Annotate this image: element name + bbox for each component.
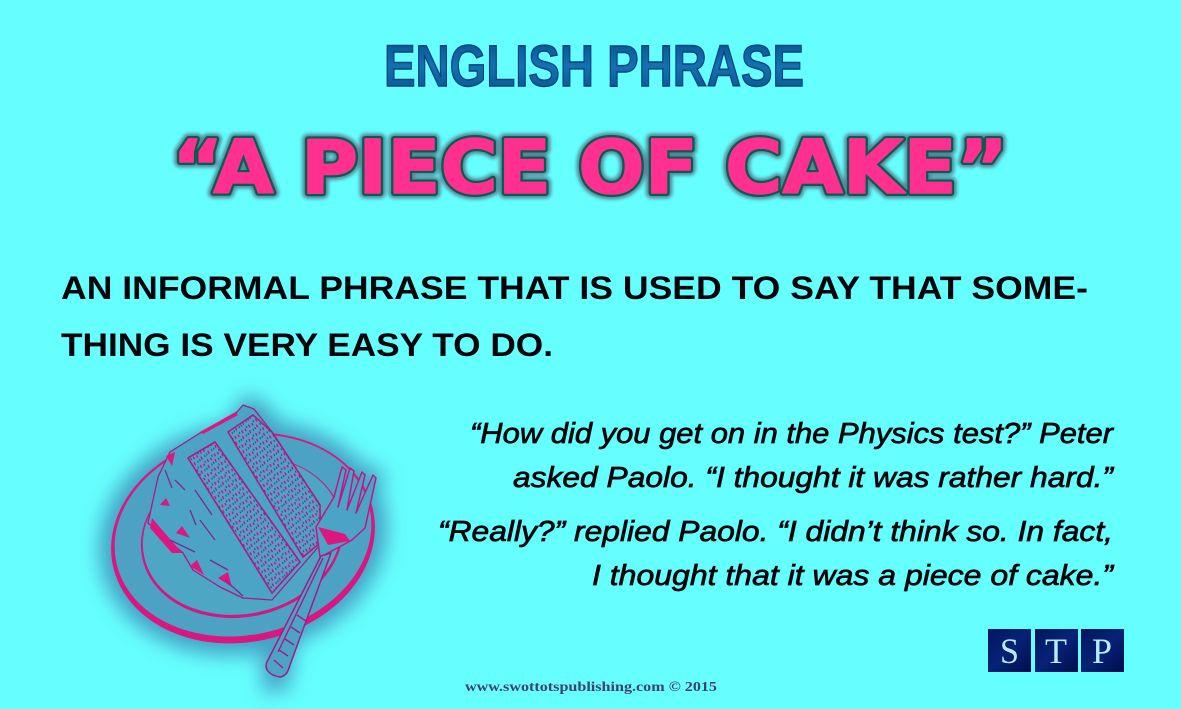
footer website credit: www.swottotspublishing.com © 2015 [465,679,717,694]
fork [266,467,376,677]
outer plate rim [91,409,395,667]
logo: STP: T [1045,631,1067,671]
example dialogue: asked Paolo. “I thought it was rather hard.” [513,462,1114,494]
sponge crumbs lower [188,442,300,593]
frosting highlights [150,412,238,587]
logo: STP: S [1000,631,1019,671]
inner plate rim [126,438,358,636]
example dialogue: “How did you get on in the Physics test?” Peter [470,418,1114,450]
logo: STP: P [1092,631,1112,671]
sponge crumbs upper [228,415,320,557]
fork bowl highlight [318,527,350,545]
fork handle pattern [274,558,323,668]
plate fill [96,411,390,660]
definition text: AN INFORMAL PHRASE THAT IS USED TO SAY THAT SOME- [61,270,1088,306]
icon: cake slice on plate with fork [77,394,409,692]
definition text [61,270,1088,363]
fork head [316,467,376,557]
cake frosting outline [148,405,320,600]
sponge layer lower [188,442,300,593]
example dialogue: “Really?” replied Paolo. “I didn’t think so. In fact, [438,516,1113,548]
inner plate fill [128,439,356,633]
sponge layer upper [228,415,320,557]
icon glow [77,394,409,692]
logo: STP [988,629,1124,672]
definition text: THING IS VERY EASY TO DO. [61,327,553,363]
frosting strokes [165,470,243,596]
title outline: “A PIECE OF CAKE” [172,125,1008,211]
title: A Piece of Cake [172,125,1008,211]
example dialogue: I thought that it was a piece of cake.” [592,560,1114,592]
title lettering: “A PIECE OF CAKE” [172,125,1008,211]
fork handle [266,553,331,677]
heading: English Phrase: ENGLISH PHRASE [384,34,804,99]
title shadow: “A PIECE OF CAKE” [172,125,1008,211]
example dialogue [438,418,1114,592]
